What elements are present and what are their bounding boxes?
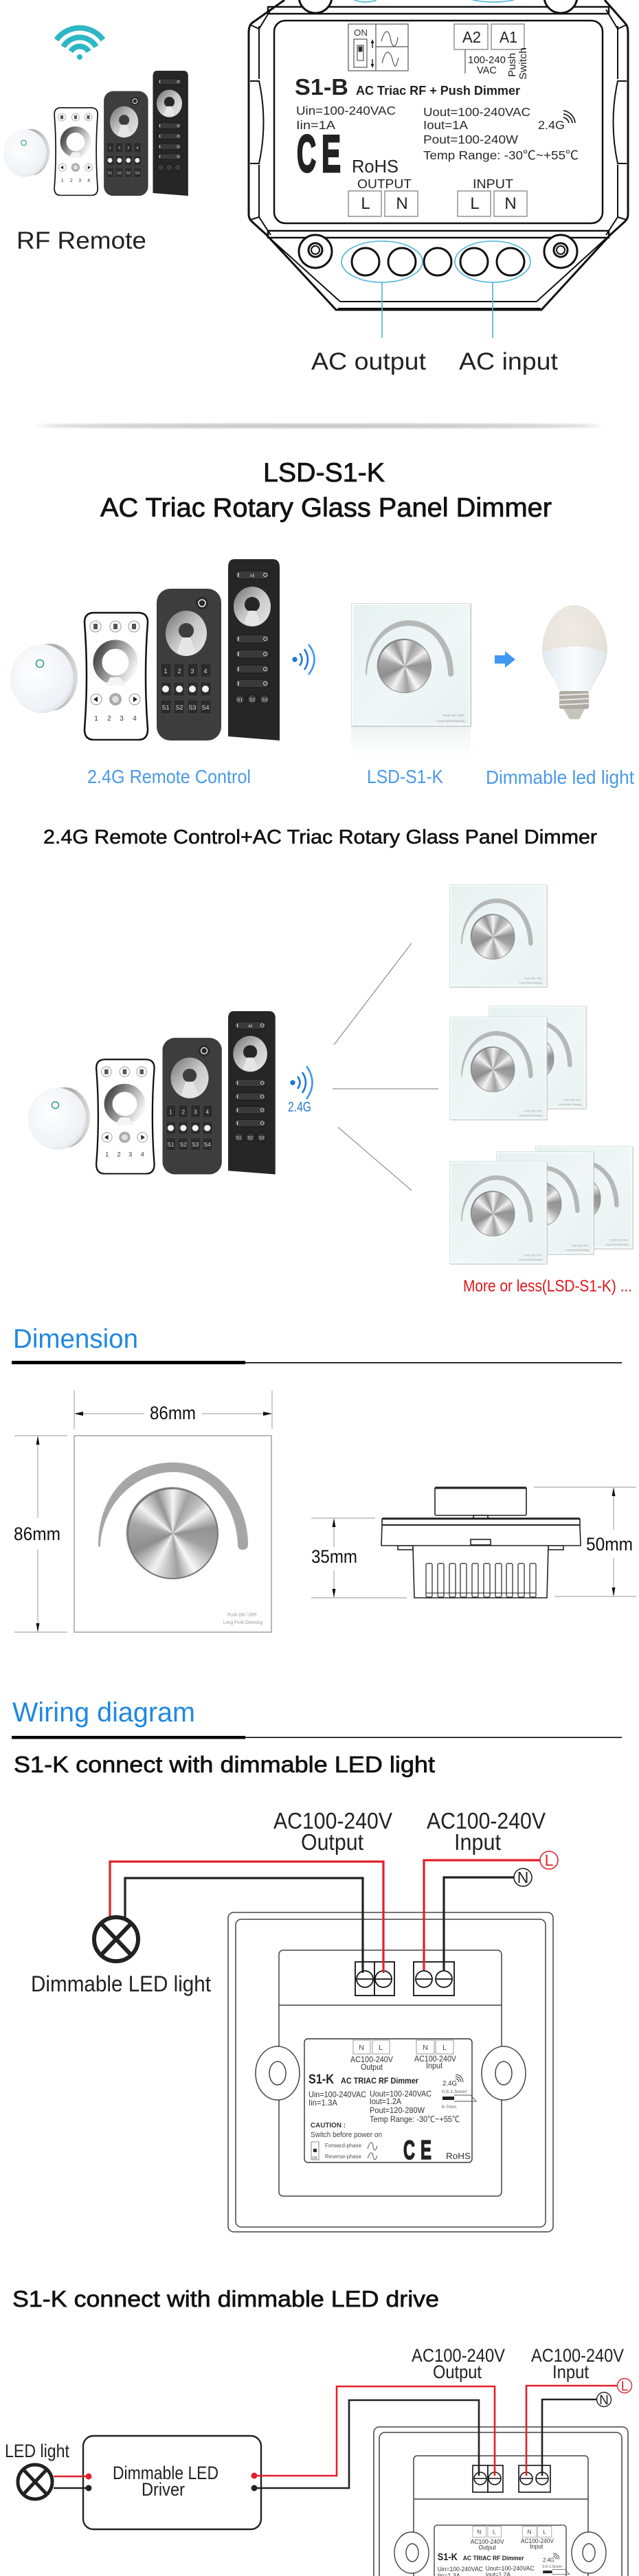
front panel drawing	[74, 1436, 271, 1632]
labels: output and input: Output	[301, 1829, 363, 1855]
caption: AC input: AC input	[459, 348, 558, 375]
product label: Output	[361, 2064, 383, 2072]
product label: C	[403, 2136, 415, 2165]
label: specifications: Temp Range: -30℃~+55℃	[423, 148, 579, 162]
remote control group: multi-zone: 2	[117, 1151, 121, 1157]
product label: AC100-240V	[414, 2055, 456, 2064]
labels: output and input: AC100-240V	[531, 2345, 624, 2366]
remote control group: multi-zone: 3	[194, 1109, 197, 1115]
logo: CE and RoHS	[297, 125, 399, 183]
remote control group: multi-zone: 3	[128, 1151, 132, 1157]
dimension: 35mm: 35mm	[311, 1546, 357, 1567]
lamp symbol	[18, 2465, 52, 2499]
dimension: 35mm	[311, 1518, 407, 1598]
product label: Input	[426, 2062, 443, 2070]
label: output input terminals: INPUT	[473, 177, 513, 191]
remote control group: multi-zone: S1	[236, 1136, 242, 1140]
product label: AC TRIAC RF Dimmer	[341, 2077, 418, 2086]
front panel drawing: Push ON / OFF	[227, 1613, 257, 1618]
terminal markers L N: L	[621, 2380, 628, 2394]
panel: LSD-S1-K glass dimmer: Long Push Dimming	[436, 719, 464, 723]
remote control group: RF remote: 2	[118, 146, 120, 150]
mounting ears	[256, 2046, 526, 2100]
product label: N	[477, 2529, 481, 2535]
remote control group: RF remote: 4	[87, 179, 90, 183]
label: A1 A2 terminals	[454, 24, 524, 49]
panel: single zone dimmer	[449, 884, 547, 987]
connector lines to panels	[333, 943, 438, 1190]
remote control group: RF remote	[3, 71, 188, 196]
panel: two zone rear dimmer	[489, 1006, 586, 1109]
product label: E	[421, 2136, 431, 2165]
panel: three zone rear dimmer: Push ON / OFF	[610, 1239, 628, 1241]
caption: RF Remote: RF Remote	[16, 227, 146, 254]
panel: three zone rear dimmer: Long Push Dimming	[605, 1243, 628, 1246]
wiring diagram 1	[31, 1808, 558, 2232]
remote control group: RF remote: 1	[109, 146, 111, 150]
labels: output and input: AC100-240V	[412, 2345, 505, 2366]
knob on dimension drawing	[127, 1488, 218, 1579]
remote control group: top diagram: All	[250, 574, 254, 578]
panel: three zone front dimmer: Push ON / OFF	[524, 1254, 542, 1256]
lamp symbol	[94, 1917, 138, 1961]
device: S1-B receiver terminal diagram: A1	[500, 28, 517, 46]
product label	[434, 2525, 570, 2576]
product label: Input	[530, 2543, 543, 2550]
labels: output and input	[273, 1808, 546, 1855]
icon: 2.4G radio signal	[288, 1066, 312, 1115]
driver box	[83, 2436, 261, 2529]
remote control group: top diagram: S4	[201, 704, 210, 711]
product label: 2.4G	[442, 2080, 457, 2088]
driver box: Driver	[142, 2479, 185, 2500]
labels: output and input: Input	[454, 1829, 501, 1855]
remote control group: RF remote: 3	[127, 146, 129, 150]
captions: remote, panel, bulb	[87, 766, 634, 788]
product label: N	[423, 2044, 428, 2052]
terminal markers L N: N	[599, 2393, 609, 2408]
product label: AC100-240V	[471, 2538, 504, 2545]
product label: Switch before power on	[311, 2131, 382, 2139]
remote control group: multi-zone: S3	[192, 1142, 199, 1148]
captions: remote, panel, bulb: 2.4G Remote Control	[87, 766, 251, 787]
panel: two zone rear dimmer: Long Push Dimming	[559, 1103, 581, 1106]
remote control group: top diagram: S2	[175, 704, 183, 711]
remote control group: top diagram: 4	[203, 668, 208, 675]
label: specifications: 2.4G	[538, 118, 565, 132]
captions: remote, panel, bulb: LSD-S1-K	[367, 766, 443, 787]
dimension: front width: 86mm	[150, 1403, 196, 1423]
icon: blue arrow	[495, 651, 515, 668]
driver contacts	[85, 2473, 257, 2491]
dimension: front height: 86mm	[14, 1524, 60, 1544]
label: specifications: Uout=100-240VAC	[423, 105, 530, 119]
label: output input terminals: N	[504, 194, 517, 213]
side view drawing	[381, 1487, 581, 1598]
dimension: 50mm: 50mm	[586, 1534, 633, 1555]
panel: single zone dimmer: Push ON / OFF	[524, 977, 542, 980]
product label: ON	[312, 2156, 317, 2160]
panel: LSD-S1-K glass dimmer: Push ON / OFF	[443, 714, 464, 717]
wiring diagram 2	[5, 2345, 632, 2576]
product label: L	[379, 2044, 383, 2052]
remote control group: RF remote: 4	[136, 146, 138, 150]
mounting ears	[394, 2532, 606, 2573]
remote control group: multi-zone: 1	[169, 1109, 172, 1115]
bulb	[542, 605, 607, 719]
title: AC Triac Rotary Glass Panel Dimmer	[100, 493, 552, 523]
wires	[110, 1860, 540, 1973]
terminal markers L N: N	[517, 1868, 528, 1886]
heading: Wiring diagram: Wiring diagram	[12, 1697, 195, 1728]
remote control group: RF remote: S2	[117, 171, 122, 175]
lamp label: LED light	[5, 2441, 69, 2461]
terminal markers L N	[596, 2378, 632, 2408]
product label: CAUTION :	[311, 2121, 346, 2129]
remote control group: RF remote: 3	[78, 179, 81, 183]
terminals	[355, 1962, 454, 1996]
label: output input terminals: L	[470, 194, 480, 213]
logo: CE and RoHS: E	[322, 125, 341, 183]
product label: Uout=100-240VAC	[370, 2089, 431, 2099]
dimension: front height	[14, 1436, 67, 1632]
dimension: 50mm	[534, 1487, 636, 1596]
product label: 0.5-1.5mm²	[542, 2565, 563, 2569]
product label: S1-K	[309, 2072, 334, 2087]
product label: L	[493, 2529, 496, 2535]
product label: RoHS	[446, 2151, 471, 2161]
label: dip switch	[348, 24, 408, 71]
remote control group: multi-zone: 1	[105, 1151, 109, 1157]
panel: two zone rear dimmer: Push ON / OFF	[563, 1098, 581, 1101]
remote control group: RF remote: S3	[126, 171, 131, 175]
remote control group: multi-zone: S2	[247, 1136, 254, 1140]
remote control group: top diagram: S1	[161, 704, 170, 711]
device: S1-B receiver terminal diagram: A2	[462, 28, 481, 46]
remote control group: multi-zone: S2	[180, 1142, 187, 1148]
remote control group: top diagram: S2	[249, 698, 255, 703]
remote control group: top diagram: 2	[177, 668, 181, 675]
product label: Output	[479, 2544, 496, 2551]
product label: Uin=100-240VAC	[438, 2566, 483, 2573]
remote control group: multi-zone	[28, 1011, 276, 1175]
dimension: front width	[74, 1390, 272, 1429]
title: LSD-S1-K	[263, 458, 385, 488]
remote control group: multi-zone: S3	[259, 1136, 265, 1140]
lamp label: Dimmable LED light	[31, 1971, 211, 1996]
device: S1-B receiver terminal diagram	[249, 0, 628, 338]
remote control group: top diagram	[10, 559, 280, 741]
product label: S1-K	[438, 2551, 458, 2563]
icon: wifi signal	[56, 28, 103, 59]
remote control group: multi-zone: All	[248, 1024, 252, 1028]
label: specifications: Iin=1A	[296, 118, 335, 132]
panel: two zone front dimmer: Push ON / OFF	[524, 1109, 542, 1112]
panel: three zone middle dimmer	[496, 1151, 594, 1254]
subheading: connect with LED light: S1-K connect with dimmable LED light	[14, 1752, 435, 1777]
product label: AC TRIAC RF Dimmer	[463, 2555, 524, 2562]
label: output input terminals: L	[361, 194, 370, 213]
device: S1-B receiver terminal diagram: Push	[506, 53, 518, 77]
panel: two zone front dimmer	[449, 1017, 547, 1120]
product label: Uin=100-240VAC	[309, 2090, 366, 2099]
label: model title: AC Triac RF + Push Dimmer	[356, 84, 520, 98]
remote control group: multi-zone: 4	[205, 1109, 209, 1115]
product label: Reverse-phase	[325, 2154, 362, 2160]
remote control group: top diagram: 3	[120, 715, 124, 723]
panel: three zone rear dimmer	[535, 1146, 633, 1249]
labels: output and input: Output	[433, 2362, 482, 2382]
panel reflection	[351, 727, 471, 757]
panel: single zone dimmer: Long Push Dimming	[519, 982, 542, 984]
label: output input terminals: OUTPUT	[357, 177, 412, 191]
label: output input terminals	[348, 177, 527, 216]
remote control group: top diagram: 1	[164, 668, 168, 675]
label: specifications	[296, 104, 579, 162]
label: output input terminals: N	[396, 194, 408, 213]
icon: 2.4G radio signal: 2.4G	[288, 1100, 311, 1115]
remote control group: multi-zone: 4	[141, 1151, 144, 1157]
product label: AC100-240V	[350, 2056, 393, 2064]
product label: 0.5-1.5mm²	[442, 2090, 468, 2094]
product label: N	[359, 2044, 364, 2052]
terminal markers L N	[514, 1851, 558, 1886]
mounting screws	[299, 0, 577, 268]
labels: output and input: Input	[552, 2362, 589, 2382]
panel: three zone front dimmer	[449, 1161, 547, 1264]
panel: three zone middle dimmer: Long Push Dimming	[566, 1249, 589, 1252]
remote control group: multi-zone: S4	[204, 1142, 211, 1148]
labels: output and input: AC100-240V	[427, 1808, 546, 1833]
back plate	[228, 1912, 553, 2232]
panel: three zone front dimmer: Long Push Dimming	[519, 1258, 542, 1261]
remote control group: top diagram: 3	[190, 668, 194, 675]
product label: Iout=1.2A	[370, 2097, 401, 2106]
logo: CE and RoHS: C	[297, 125, 316, 183]
labels: output and input: AC100-240V	[273, 1808, 392, 1833]
label: specifications: Pout=100-240W	[423, 133, 519, 146]
label: model title: S1-B	[295, 74, 348, 100]
product label: L	[442, 2044, 447, 2052]
device: S1-B receiver terminal diagram: 100-240	[468, 54, 506, 66]
heading: multi-zone control: 2.4G Remote Control+AC Triac Rotary Glass Panel Dimmer	[43, 826, 597, 848]
device: S1-B receiver terminal diagram: VAC	[477, 65, 497, 76]
product label: Pout=120-280W	[370, 2105, 425, 2115]
label: model title	[295, 74, 520, 100]
remote control group: RF remote: S4	[135, 171, 139, 175]
remote control group: top diagram: 4	[133, 715, 137, 723]
product label: Forward-phase	[325, 2143, 362, 2149]
product label	[304, 2039, 476, 2165]
remote control group: RF remote: S1	[108, 171, 112, 175]
labels: output and input	[412, 2345, 624, 2382]
logo: CE and RoHS: RoHS	[352, 156, 399, 177]
remote control group: RF remote: 1	[61, 179, 64, 183]
remote control group: top diagram: S3	[262, 698, 267, 703]
section shadow divider	[38, 423, 601, 429]
device: S1-B receiver terminal diagram: ON	[354, 27, 368, 38]
remote control group: multi-zone: 2	[182, 1109, 186, 1115]
device: S1-B receiver terminal diagram: Switch	[517, 47, 529, 80]
callout lines	[341, 0, 530, 338]
heading: Dimension	[12, 1324, 622, 1364]
driver box: Dimmable LED	[113, 2463, 218, 2483]
remote control group: top diagram: S1	[237, 698, 243, 703]
terminals	[473, 2465, 550, 2492]
label: specifications: Uin=100-240VAC	[296, 104, 396, 117]
remote control group: multi-zone: S1	[167, 1142, 175, 1148]
label: specifications: Iout=1A	[423, 118, 468, 132]
product label: AC100-240V	[521, 2538, 554, 2544]
subheading: connect with LED drive: S1-K connect with dimmable LED drive	[12, 2286, 439, 2312]
icon: radio signal	[293, 644, 315, 675]
back plate	[374, 2427, 628, 2576]
title	[100, 458, 552, 523]
remote control group: RF remote: 2	[70, 179, 73, 183]
product label: 2.4G	[543, 2557, 554, 2564]
product label: N	[528, 2529, 532, 2535]
remote control group: top diagram: 1	[94, 715, 98, 723]
heading: Wiring diagram	[12, 1697, 622, 1739]
heading: Dimension: Dimension	[13, 1324, 138, 1354]
terminal holes	[352, 248, 524, 275]
terminal markers L N: L	[545, 1851, 554, 1869]
product label: Temp Range: -30℃~+55℃	[370, 2114, 460, 2124]
caption: AC output: AC output	[311, 348, 426, 375]
product label: 6-7mm	[442, 2105, 456, 2110]
product label: L	[543, 2529, 546, 2535]
panel: LSD-S1-K glass dimmer	[351, 603, 471, 726]
panel: three zone middle dimmer: Push ON / OFF	[571, 1244, 589, 1247]
wires	[54, 2386, 618, 2488]
remote control group: top diagram: 2	[107, 715, 111, 723]
front panel drawing: Long Push Dimming	[223, 1620, 262, 1625]
remote control group: top diagram: S3	[188, 704, 197, 711]
product label: Uout=100-240VAC	[486, 2565, 535, 2573]
panel: two zone front dimmer: Long Push Dimming	[519, 1114, 542, 1117]
product label: Iin=1.3A	[309, 2098, 337, 2108]
